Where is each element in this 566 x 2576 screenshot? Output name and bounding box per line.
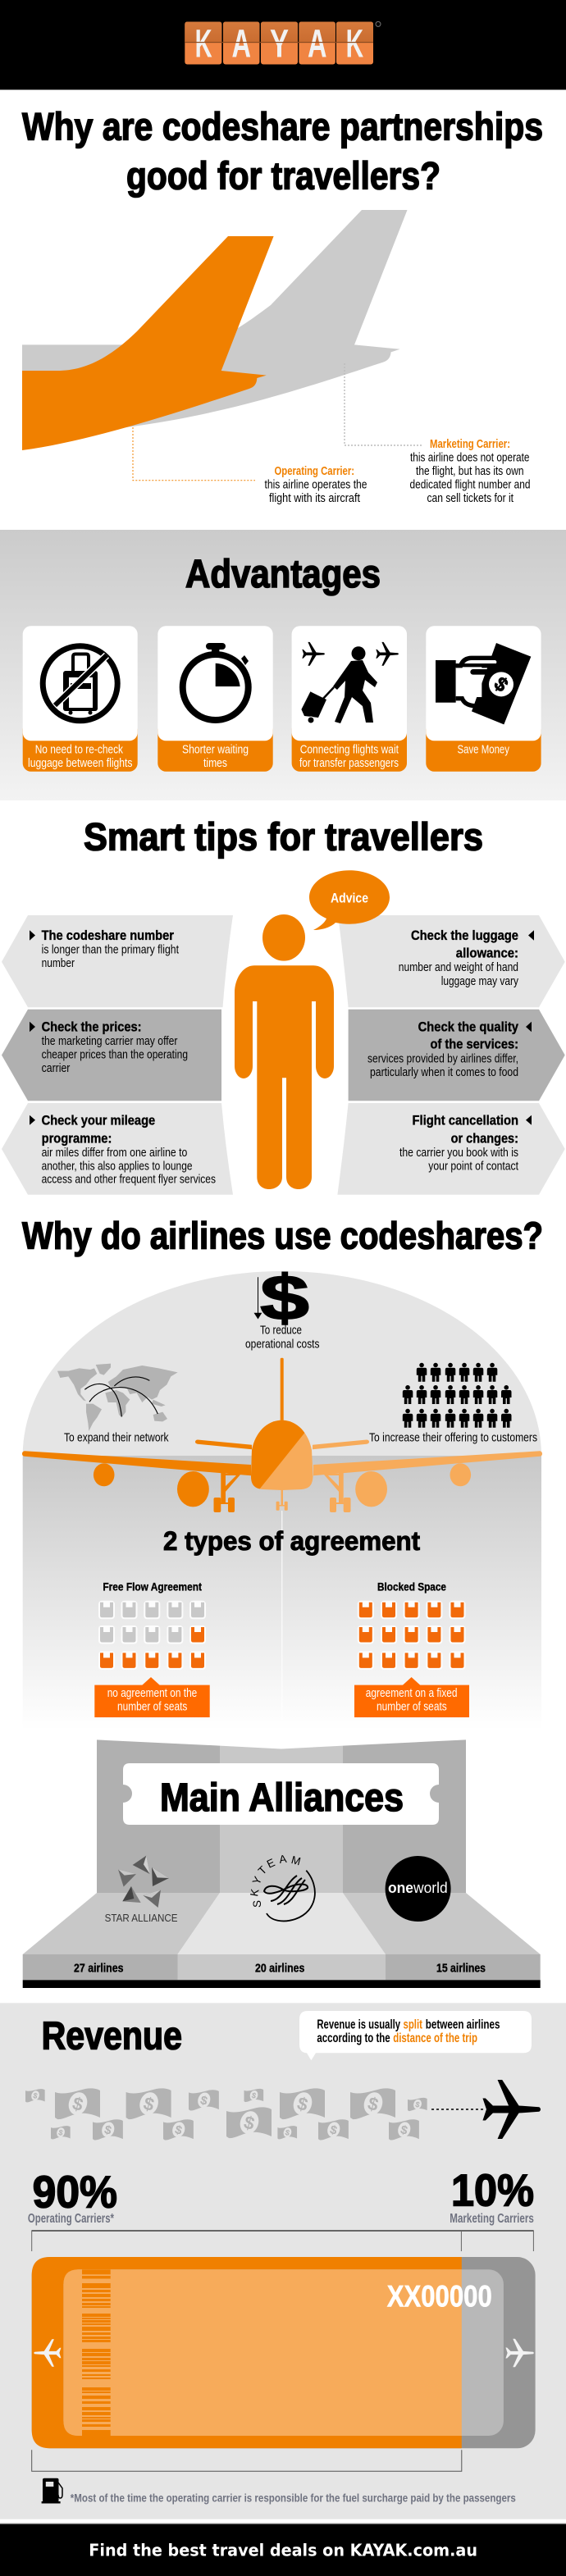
icon: orange person: [235, 914, 334, 1189]
stat: 90 percent: Operating Carriers*: [28, 2212, 115, 2226]
panel: quality of services tip: Check the quality: [418, 1019, 519, 1034]
KAYAK logo: Y: [270, 22, 289, 66]
panel: agreement background: [23, 1456, 541, 1730]
operating carrier connector: [133, 427, 255, 481]
KAYAK logo: K: [195, 22, 212, 66]
money flags: $: [366, 2093, 381, 2115]
panel: luggage allowance tip: [338, 915, 565, 1007]
icon: traveller with luggage: [301, 642, 399, 723]
panel: cancellation tip: [337, 1103, 565, 1195]
card: connecting flights: [292, 626, 407, 772]
speech bubble: split: [404, 2017, 422, 2031]
panel: check the prices tip: the marketing carrier may offer: [42, 1035, 178, 1048]
caption: [182, 743, 249, 770]
caption: To increase their offering to customers: [369, 1432, 537, 1445]
money flags: $: [173, 2123, 183, 2138]
operating carrier text: [264, 465, 367, 505]
orange tail: operating carrier: [22, 236, 274, 450]
KAYAK logo: A: [308, 22, 326, 66]
logo: star alliance: [105, 1856, 177, 1924]
main title: [22, 106, 543, 198]
caption: To expand their network: [64, 1432, 169, 1445]
seat grid: [358, 1601, 466, 1670]
operating carrier text: Operating Carrier:: [274, 465, 354, 478]
stat: 90 percent: 90%: [33, 2167, 117, 2218]
panel: codeshare number tip: is longer than the primary flight: [42, 944, 179, 957]
marketing carrier text: [410, 438, 530, 505]
panel: main alliances stage: [23, 1739, 541, 1988]
main title: good for travellers?: [126, 155, 440, 198]
speech bubble: distance of the trip: [393, 2031, 477, 2045]
airline counts: 20 airlines: [255, 1962, 304, 1976]
panel: luggage allowance tip: luggage may vary: [441, 975, 519, 988]
panel: mileage programme tip: programme:: [42, 1131, 112, 1146]
caption: Shorter waiting: [182, 743, 249, 756]
icon: white plane left: [34, 2339, 61, 2367]
panel: quality of services tip: of the services:: [430, 1037, 518, 1052]
money flags: $: [295, 2093, 310, 2115]
panel: cancellation tip: Flight cancellation: [412, 1113, 518, 1128]
money flags: $: [141, 2093, 157, 2115]
panel: check the prices tip: carrier: [42, 1062, 71, 1075]
panel: codeshare number tip: [2, 915, 233, 1007]
panel: free flow agreement: Free Flow Agreement: [103, 1580, 202, 1593]
KAYAK logo: K: [346, 22, 363, 66]
icon: dollar: $: [260, 1261, 309, 1334]
money flags: $: [103, 2123, 112, 2138]
card: shorter waiting: [157, 626, 273, 772]
divider line: [281, 1511, 282, 1720]
logo: oneworld: [386, 1856, 451, 1922]
boarding pass: [32, 2257, 536, 2448]
airline counts: 15 airlines: [436, 1962, 486, 1976]
speech bubble: Revenue is usually: [317, 2017, 400, 2031]
panel: mileage programme tip: access and other frequent flyer services: [42, 1174, 216, 1187]
advice speech bubble: Advice: [331, 891, 368, 906]
speech bubble: according to the: [317, 2031, 390, 2045]
money flags: $: [399, 2123, 409, 2138]
airline counts: [74, 1962, 486, 1976]
more customers block: [369, 1363, 537, 1445]
panel: luggage allowance tip: number and weight of hand: [399, 961, 518, 974]
panel: quality of services tip: [349, 1010, 565, 1101]
panel: mileage programme tip: air miles differ from one airline to: [42, 1147, 187, 1160]
logo: star alliance: STAR ALLIANCE: [105, 1913, 177, 1924]
icon: fuel pump: [42, 2478, 62, 2503]
money flags: $: [57, 2128, 64, 2138]
speech bubble: between airlines: [426, 2017, 500, 2031]
airline counts: 27 airlines: [74, 1962, 123, 1976]
panel: codeshare number tip: number: [42, 957, 75, 970]
money flags: $: [71, 2093, 85, 2115]
ticket heading: main alliances: [123, 1763, 439, 1825]
panel: blocked space: [354, 1580, 469, 1717]
panel: cancellation tip: or changes:: [451, 1131, 518, 1146]
panel: luggage allowance tip: Check the luggage: [411, 928, 518, 943]
caption: times: [203, 757, 227, 770]
callout: number of seats: [377, 1701, 447, 1714]
marketing carrier text: the flight, but has its own: [416, 465, 523, 478]
money flags: [25, 2088, 427, 2141]
callout: agreement on a fixed: [366, 1687, 458, 1700]
heading: revenue: Revenue: [42, 2015, 182, 2059]
logo: oneworld: oneworld: [388, 1880, 448, 1896]
marketing carrier text: Marketing Carrier:: [430, 438, 510, 451]
callout: [94, 1677, 210, 1717]
panel: advantages: [0, 530, 566, 800]
panel: dome background: [23, 1271, 541, 1456]
caption: for transfer passengers: [299, 757, 399, 770]
grey tail: marketing carrier: [22, 210, 407, 443]
marketing carrier text: can sell tickets for it: [427, 492, 514, 505]
caption: No need to re-check: [35, 743, 124, 756]
panel: check the prices tip: cheaper prices than the operating: [42, 1049, 188, 1062]
money flags: $: [284, 2128, 291, 2138]
heading: advantages: Advantages: [185, 553, 381, 596]
flight number: XX00000: [387, 2280, 492, 2314]
icon: no luggage: [43, 646, 117, 721]
money flags: $: [199, 2094, 208, 2109]
callout: number of seats: [117, 1701, 187, 1714]
ticket heading: main alliances: Main Alliances: [160, 1776, 404, 1820]
card: save money: [426, 626, 541, 772]
icon: down arrow: [254, 1277, 262, 1319]
caption: luggage between flights: [28, 757, 133, 770]
aircraft tails illustration: [22, 210, 407, 450]
heading: 2 types of agreement: 2 types of agreement: [163, 1526, 420, 1556]
panel: free flow agreement: [94, 1580, 210, 1717]
marketing carrier connector: [345, 363, 422, 445]
seat grid: [98, 1601, 206, 1670]
panel: cancellation tip: the carrier you book with is: [399, 1147, 518, 1160]
money flags: $: [32, 2091, 39, 2101]
operating carrier text: flight with its aircraft: [269, 492, 360, 505]
money flags: $: [414, 2100, 421, 2110]
marketing carrier text: this airline does not operate: [410, 451, 530, 464]
panel: codeshare number tip: The codeshare number: [42, 928, 175, 943]
stat: 10 percent: Marketing Carriers: [450, 2212, 534, 2226]
panel: cancellation tip: your point of contact: [428, 1160, 518, 1174]
card: no re-check: [23, 626, 138, 772]
top bracket: [32, 2231, 533, 2251]
panel: luggage allowance tip: allowance:: [456, 946, 518, 960]
advice speech bubble: [309, 870, 390, 930]
panel: quality of services tip: particularly when it comes to food: [370, 1066, 518, 1079]
barcode: [82, 2269, 111, 2436]
reduce costs block: [245, 1261, 320, 1351]
heading: smart tips: Smart tips for travellers: [84, 815, 483, 859]
icon: hand with money: [436, 643, 531, 724]
icon: plane: [482, 2080, 541, 2139]
airplane front view: [22, 1358, 542, 1512]
dotted flight path: [431, 2109, 484, 2110]
caption: Connecting flights wait: [300, 743, 399, 756]
logo: skyteam: SKYTEAM: [248, 1853, 302, 1908]
icon: crowd of people: [403, 1363, 512, 1428]
icon: world map: [57, 1364, 178, 1431]
panel: blocked space: Blocked Space: [377, 1580, 446, 1593]
panel: mileage programme tip: [2, 1103, 233, 1195]
panel: quality of services tip: services provided by airlines differ,: [367, 1052, 518, 1065]
icon: white plane right: [505, 2339, 534, 2367]
KAYAK logo: A: [231, 22, 251, 66]
KAYAK logo: [185, 21, 381, 66]
money flags: $: [328, 2123, 338, 2138]
callout: [354, 1677, 469, 1717]
caption: [245, 1324, 320, 1351]
caption: Save Money: [458, 743, 510, 756]
expand network block: [57, 1364, 178, 1445]
logo: skyteam: [248, 1853, 315, 1921]
speech bubble: [299, 2011, 532, 2060]
footer band: [0, 2523, 566, 2576]
caption: [299, 743, 399, 770]
caption: operational costs: [245, 1338, 320, 1351]
marketing carrier text: dedicated flight number and: [410, 479, 530, 492]
callout: no agreement on the: [107, 1687, 197, 1700]
panel: revenue: [0, 2003, 566, 2519]
operating carrier text: this airline operates the: [264, 479, 367, 492]
stat: 10 percent: 10%: [451, 2164, 534, 2215]
panel: check the prices tip: [2, 1010, 221, 1101]
bottom bracket: [32, 2450, 462, 2471]
footer call to action: Find the best travel deals on KAYAK.com.au: [89, 2541, 477, 2560]
panel: mileage programme tip: another, this also applies to lounge: [42, 1160, 192, 1174]
caption: To reduce: [260, 1324, 302, 1338]
header band: [0, 0, 566, 90]
money flags: $: [242, 2112, 257, 2134]
panel: mileage programme tip: Check your mileage: [42, 1113, 155, 1128]
caption: [28, 743, 133, 770]
icon: hand with money: $: [490, 672, 513, 697]
panel: check the prices tip: Check the prices:: [42, 1019, 141, 1034]
icon: stopwatch: [183, 643, 249, 720]
money flags: $: [250, 2091, 258, 2101]
